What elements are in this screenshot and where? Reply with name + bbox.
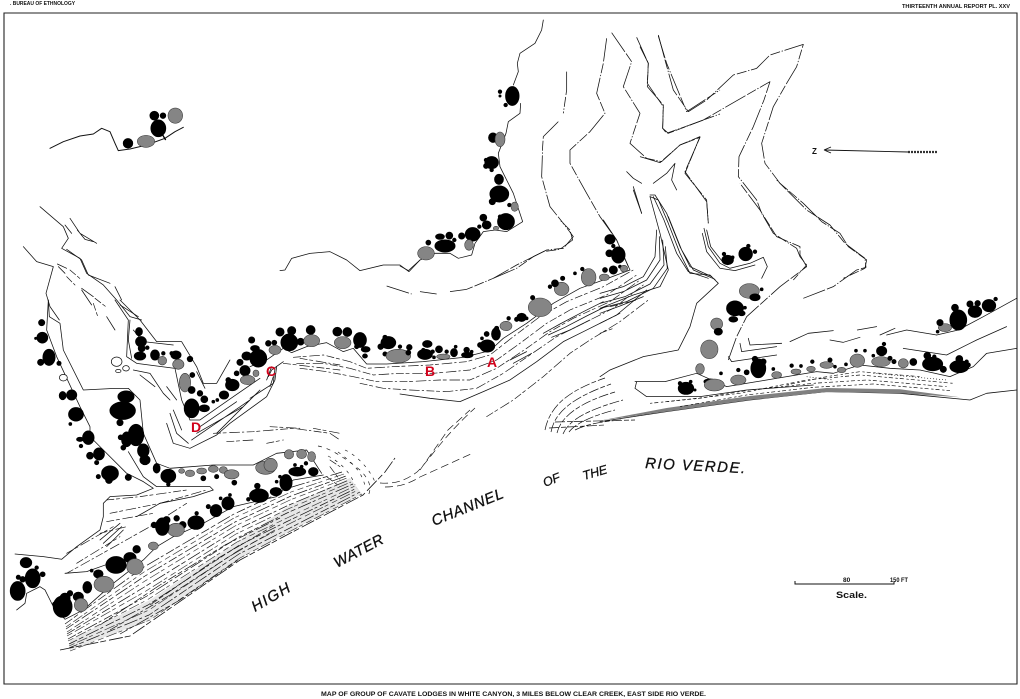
map: right canyon contours and shoreline: [600, 180, 1017, 422]
site label D: D: [191, 419, 201, 435]
channel label: THE: THE: [581, 462, 609, 483]
map: north-east contour lines: [640, 35, 867, 280]
map: upper-left outlier cluster: [50, 108, 183, 151]
plate caption: MAP OF GROUP OF CAVATE LODGES IN WHITE CANYON, 3 MILES BELOW CLEAR CREEK, EAST SIDE RIO VERDE.: [321, 691, 706, 698]
map: main cliff band with A, B and C sites: [250, 220, 648, 417]
map: west canyon and side ravines: [23, 207, 142, 320]
map: south-west canyon floor and lines: [15, 300, 340, 619]
scale bar: 80: [843, 577, 851, 584]
site label A: A: [487, 354, 497, 370]
cavate lodges: south-west clusters: [10, 320, 318, 617]
channel label: CHANNEL: CHANNEL: [429, 485, 506, 530]
channel label: WATER: WATER: [331, 531, 387, 572]
channel label: HIGH: HIGH: [248, 580, 294, 615]
cavate lodges: main cliff clusters: [276, 267, 609, 363]
site label B: B: [425, 363, 435, 379]
map: contour lines, north canyon: [400, 20, 720, 278]
plate header: bureau of ethnology: . BUREAU OF ETHNOLOGY: [10, 1, 76, 7]
map: river channel dashes near the bend: [318, 408, 475, 496]
channel label: RIO VERDE: RIO VERDE.: [645, 455, 746, 477]
plate header: annual report: THIRTEENTH ANNUAL REPORT PL. XXV: [902, 4, 1011, 10]
site label C: C: [266, 363, 276, 379]
scale bar: Scale.: [836, 590, 867, 601]
scale bar: 150 FT: [890, 577, 908, 584]
map: hatched talus slope of the lower-left band: [60, 458, 395, 651]
channel label: OF: OF: [541, 470, 563, 490]
north arrow: [812, 147, 938, 156]
north arrow: Z: [812, 147, 817, 156]
scale bar: [795, 577, 908, 601]
map: swirl at the head of the lower right band: [545, 378, 635, 434]
cavate lodges: right canyon and eastern shore clusters: [678, 244, 997, 394]
cavate lodges: north canyon clusters: [418, 87, 628, 274]
